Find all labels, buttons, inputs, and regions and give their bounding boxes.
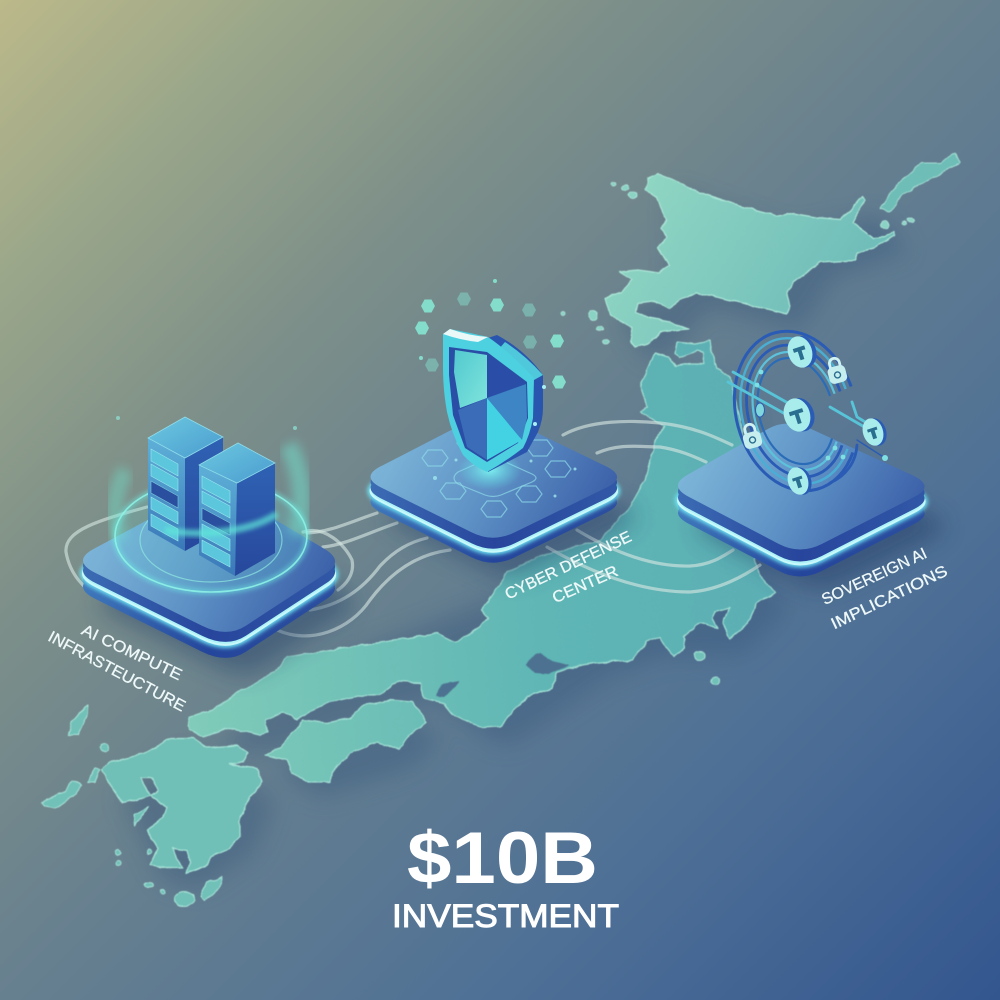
label: cyber defense center: CYBER DEFENSE xyxy=(503,529,634,603)
padlock xyxy=(824,356,848,385)
platform shadow xyxy=(698,463,945,590)
headline figure: $10B xyxy=(407,818,598,899)
headline caption: INVESTMENT xyxy=(392,898,619,934)
island: Kuril chain xyxy=(880,153,960,212)
hexagon circuit pattern xyxy=(422,435,571,517)
platform top face xyxy=(83,490,335,632)
bay: Ise xyxy=(527,653,570,674)
shield side xyxy=(488,335,543,472)
platform 1: AI compute xyxy=(83,416,353,674)
platform base xyxy=(678,429,925,576)
label: AI compute infrastructure: AI COMPUTE xyxy=(79,622,184,684)
floating hexagons xyxy=(415,279,566,388)
circuit dots xyxy=(433,458,576,498)
platform shadow xyxy=(101,532,353,674)
landmasses xyxy=(42,153,960,906)
connection lines xyxy=(66,421,760,636)
map of Japan xyxy=(42,153,960,906)
glow rings xyxy=(115,445,307,592)
island: Hokkaido xyxy=(605,173,895,348)
padlock xyxy=(740,422,763,450)
island: Shikoku xyxy=(265,700,427,782)
platform base xyxy=(371,420,617,563)
southern islets xyxy=(42,652,719,906)
platform top face xyxy=(678,423,925,550)
ring ends and node dots xyxy=(755,370,888,461)
label: AI compute infrastructure: INFRASTEUCTURE xyxy=(45,629,188,715)
platform shadow xyxy=(389,455,635,578)
coin xyxy=(859,415,890,449)
bay: Osaka xyxy=(436,680,460,697)
server rack 2 xyxy=(199,443,275,576)
shield base glow xyxy=(458,450,522,490)
shield icon xyxy=(443,329,546,472)
shield top highlight xyxy=(443,329,488,342)
coin xyxy=(784,332,820,372)
glowing band across racks xyxy=(165,514,277,533)
island: Kyushu xyxy=(102,738,262,873)
small coin xyxy=(756,403,764,417)
shield bevel xyxy=(498,342,543,380)
coin xyxy=(779,394,819,436)
platform 2: cyber defense xyxy=(371,279,635,578)
shield front xyxy=(443,329,534,472)
label: sovereign AI implications xyxy=(819,545,950,633)
platform 3: sovereign AI xyxy=(678,317,945,590)
sparkle dots xyxy=(116,416,297,430)
server rack 1 xyxy=(148,417,223,551)
map shadow xyxy=(121,189,909,889)
label: sovereign AI implications: SOVEREIGN AI xyxy=(819,545,930,609)
island: Honshu xyxy=(188,341,775,737)
ring of circuit arcs xyxy=(717,317,875,505)
lock coins xyxy=(740,332,890,498)
label: cyber defense center: CENTER xyxy=(550,563,621,607)
circuit lines xyxy=(728,372,885,483)
platform base xyxy=(83,495,335,658)
small northern islets xyxy=(561,182,914,344)
shield inner border xyxy=(449,347,528,462)
platform top face xyxy=(371,415,617,538)
label: sovereign AI implications: IMPLICATIONS xyxy=(829,563,950,633)
coin xyxy=(784,464,815,498)
